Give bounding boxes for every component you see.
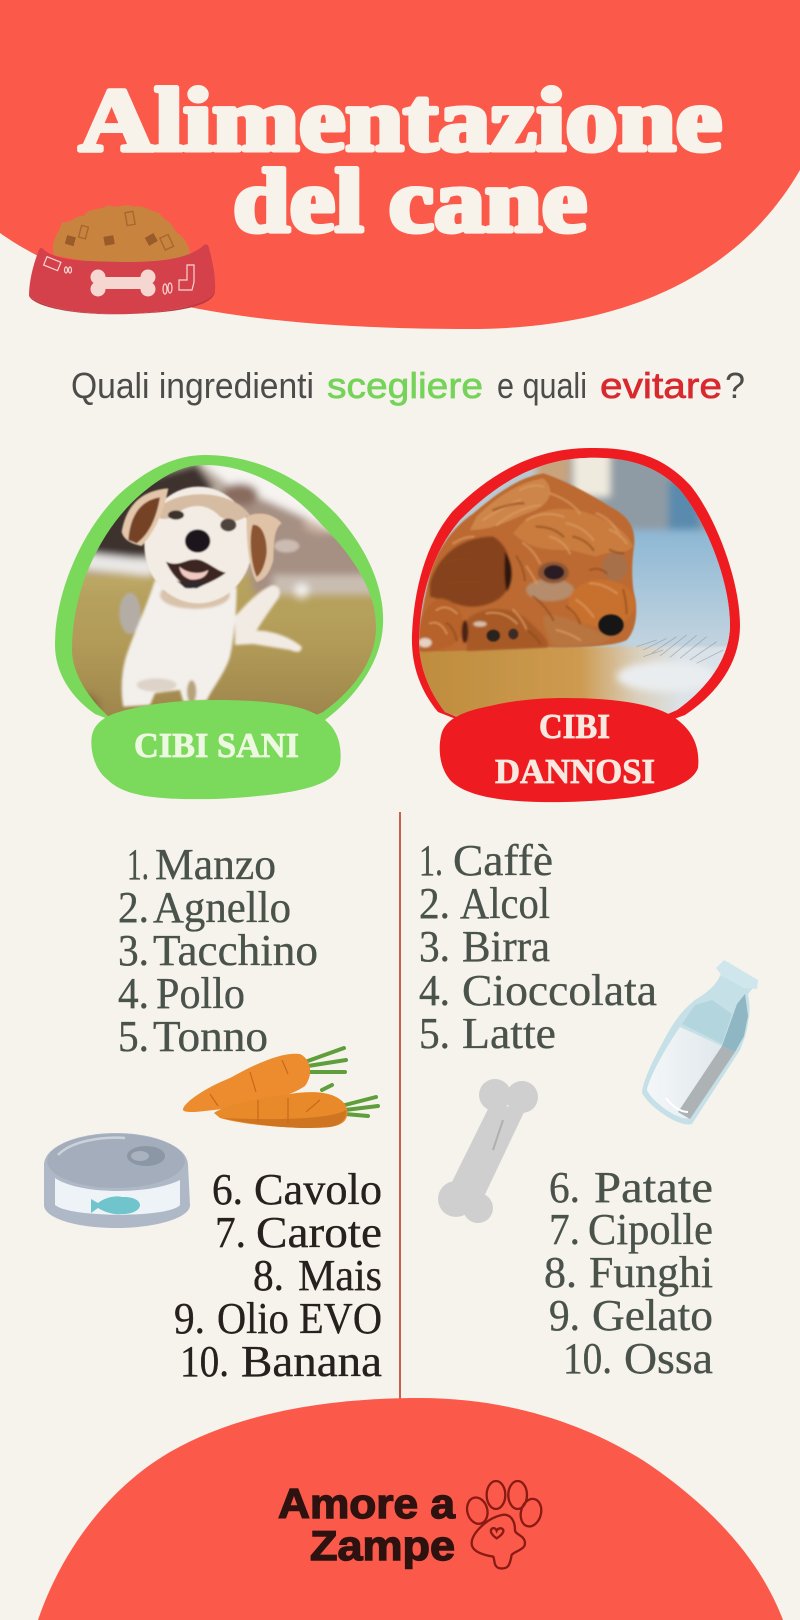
label: cibi sani: CIBI SANI <box>134 726 299 765</box>
photo: sad brown puppy <box>419 458 730 717</box>
healthy list 6 to 10: 7. <box>215 1208 246 1257</box>
label: cibi dannosi: CIBI <box>539 707 610 746</box>
photo: happy white dog <box>72 465 376 716</box>
subtitle question: Quali ingredienti <box>71 365 314 406</box>
panel: healthy foods badge <box>40 455 383 799</box>
healthy list 6 to 10: Olio EVO <box>217 1294 382 1343</box>
healthy list 1 to 5: 4. <box>118 969 149 1018</box>
harmful list 1 to 5: Cioccolata <box>462 966 657 1015</box>
bottom red footer shape <box>38 1398 783 1620</box>
harmful list 6 to 10: 6. <box>549 1163 580 1212</box>
healthy list 1 to 5: Agnello <box>153 883 291 932</box>
subtitle question: scegliere <box>327 365 483 406</box>
healthy list 1 to 5: 2. <box>118 883 149 932</box>
harmful list 6 to 10: Ossa <box>624 1334 713 1383</box>
healthy list 6 to 10 <box>174 1165 382 1386</box>
healthy list 6 to 10: 9. <box>174 1294 205 1343</box>
title: del cane <box>233 152 587 251</box>
healthy list 6 to 10: 10. <box>180 1337 229 1386</box>
icon: paw outline <box>464 1481 544 1568</box>
healthy list 1 to 5: Pollo <box>156 969 245 1018</box>
label: cibi dannosi <box>495 707 655 791</box>
harmful list 1 to 5: 4. <box>419 966 450 1015</box>
healthy list 1 to 5: 1. <box>127 840 149 889</box>
harmful list 1 to 5: Birra <box>462 922 550 971</box>
icon: grey bone <box>438 1079 538 1223</box>
healthy list 6 to 10: Banana <box>241 1337 382 1386</box>
healthy list 1 to 5: 3. <box>118 926 149 975</box>
icon: milk bottle <box>642 960 758 1125</box>
label: cibi dannosi: DANNOSI <box>495 752 655 791</box>
harmful list 6 to 10: Gelato <box>592 1291 713 1340</box>
logo wordmark <box>278 1480 456 1569</box>
healthy list 1 to 5: Tacchino <box>153 926 318 975</box>
icon: carrots <box>183 1048 378 1128</box>
healthy list 1 to 5: Manzo <box>155 840 276 889</box>
harmful list 1 to 5 <box>419 836 657 1058</box>
harmful list 1 to 5: 2. <box>419 879 450 928</box>
healthy list 6 to 10: Mais <box>298 1251 382 1300</box>
logo wordmark: Amore a <box>278 1480 456 1527</box>
subtitle question: evitare <box>600 365 722 406</box>
healthy list 6 to 10: 8. <box>253 1251 284 1300</box>
harmful list 6 to 10: 7. <box>549 1205 580 1254</box>
panel: harmful foods badge <box>410 448 750 802</box>
harmful list 1 to 5: 3. <box>419 922 450 971</box>
healthy list 1 to 5: Tonno <box>153 1012 268 1061</box>
harmful list 1 to 5: Alcol <box>460 879 550 928</box>
icon: tuna can <box>44 1133 190 1228</box>
healthy list 1 to 5: 5. <box>118 1012 149 1061</box>
center divider line <box>399 812 401 1400</box>
harmful list 6 to 10: 10. <box>563 1334 612 1383</box>
red label pill <box>440 698 698 802</box>
harmful list 1 to 5: Latte <box>462 1009 556 1058</box>
harmful list 1 to 5: 5. <box>419 1009 450 1058</box>
logo: amore a zampe <box>278 1480 544 1569</box>
icon: dog food bowl <box>29 205 215 314</box>
subtitle question <box>71 365 745 406</box>
harmful list 6 to 10: 8. <box>544 1248 577 1297</box>
healthy list 1 to 5 <box>118 840 318 1061</box>
subtitle question: ? <box>725 365 745 406</box>
top red header shape <box>0 0 800 329</box>
harmful list 6 to 10: Patate <box>594 1163 713 1212</box>
green label pill <box>91 700 341 799</box>
red blob frame <box>412 448 740 760</box>
green blob frame <box>55 455 383 760</box>
healthy list 6 to 10: 6. <box>212 1165 243 1214</box>
harmful list 6 to 10 <box>544 1163 713 1383</box>
title <box>79 71 722 251</box>
harmful list 1 to 5: 1. <box>419 836 443 885</box>
harmful list 6 to 10: Funghi <box>589 1248 713 1297</box>
harmful list 6 to 10: 9. <box>549 1291 580 1340</box>
logo wordmark: Zampe <box>310 1522 455 1569</box>
harmful list 6 to 10: Cipolle <box>588 1205 713 1254</box>
title: Alimentazione <box>79 71 722 170</box>
harmful list 1 to 5: Caffè <box>453 836 553 885</box>
subtitle question: e quali <box>497 365 587 406</box>
healthy list 6 to 10: Cavolo <box>254 1165 382 1214</box>
healthy list 6 to 10: Carote <box>256 1208 382 1257</box>
